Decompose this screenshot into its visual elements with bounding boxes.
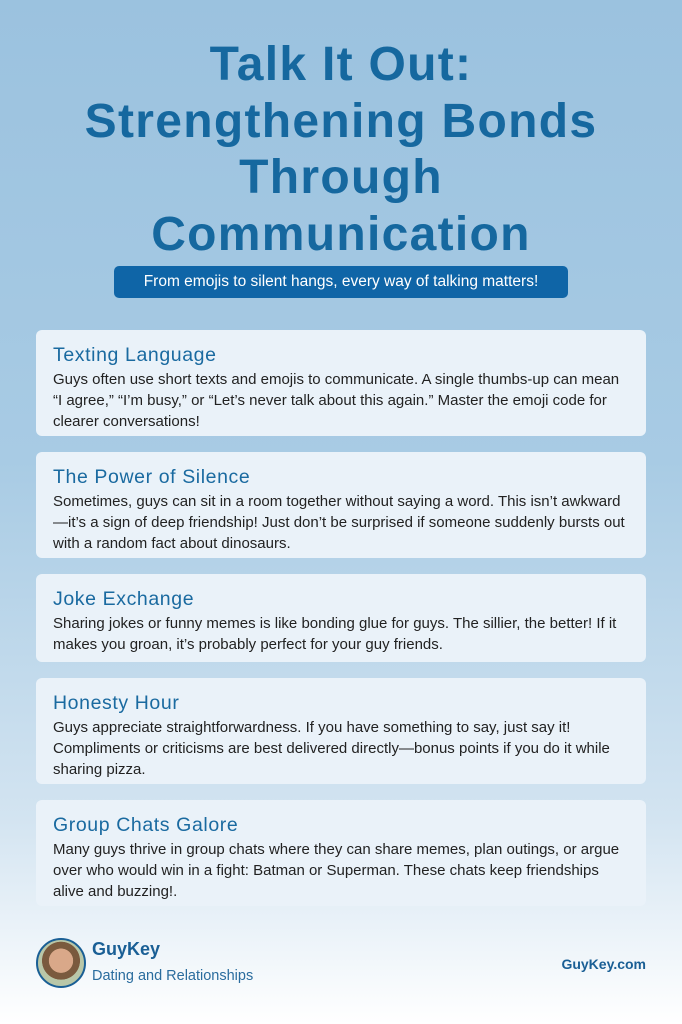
panel: texting language: Guys often use short texts and emojis to communicate. A single thumbs-up can mean “I agree,” “I’m busy,” or “Let’s never talk about this again.” Master the emoji code for clearer conversations! [53, 371, 619, 430]
panel: group chats: Many guys thrive in group chats where they can share memes, plan outings, or argue over who would win in a fight: Batman or Superman. These chats keep friendships alive and buzzing!. [53, 841, 619, 900]
title: Talk It Out: [210, 38, 472, 91]
panel: texting language [36, 330, 646, 436]
website: GuyKey.com [561, 956, 646, 972]
panel: power of silence: Sometimes, guys can sit in a room together without saying a word. This isn’t awkward [53, 493, 620, 510]
brand name: GuyKey [92, 939, 160, 959]
panel: honesty hour [36, 678, 646, 784]
title: Through [239, 151, 443, 204]
panel: group chats [36, 800, 646, 906]
panel: honesty hour: Honesty Hour [53, 692, 179, 714]
icon: avatar [36, 938, 86, 988]
title [85, 38, 597, 260]
footer [36, 938, 646, 988]
panel: joke exchange: Joke Exchange [53, 588, 194, 610]
panel: group chats: Group Chats Galore [53, 814, 238, 836]
title: Strengthening Bonds [85, 94, 597, 148]
panel: joke exchange [36, 574, 646, 662]
subtitle pill [114, 266, 568, 298]
title: Communication [151, 208, 531, 260]
panel: power of silence [36, 452, 646, 558]
brand tagline: Dating and Relationships [92, 968, 253, 984]
panel: texting language: Texting Language [53, 344, 217, 366]
panel: power of silence: —it’s a sign of deep friendship! Just don’t be surprised if someone suddenly bursts out with a random fact about dinosaurs. [53, 514, 625, 552]
panel: joke exchange: Sharing jokes or funny memes is like bonding glue for guys. The sillier, the better! If it makes you groan, it’s probably perfect for your guy friends. [53, 615, 616, 653]
panel: honesty hour: Guys appreciate straightforwardness. If you have something to say, just say it! Compliments or criticisms are best delivered directly—bonus points if you do it while sharing pizza. [53, 719, 610, 778]
subtitle pill: From emojis to silent hangs, every way of talking matters! [144, 273, 538, 290]
panel: power of silence: The Power of Silence [53, 466, 250, 488]
